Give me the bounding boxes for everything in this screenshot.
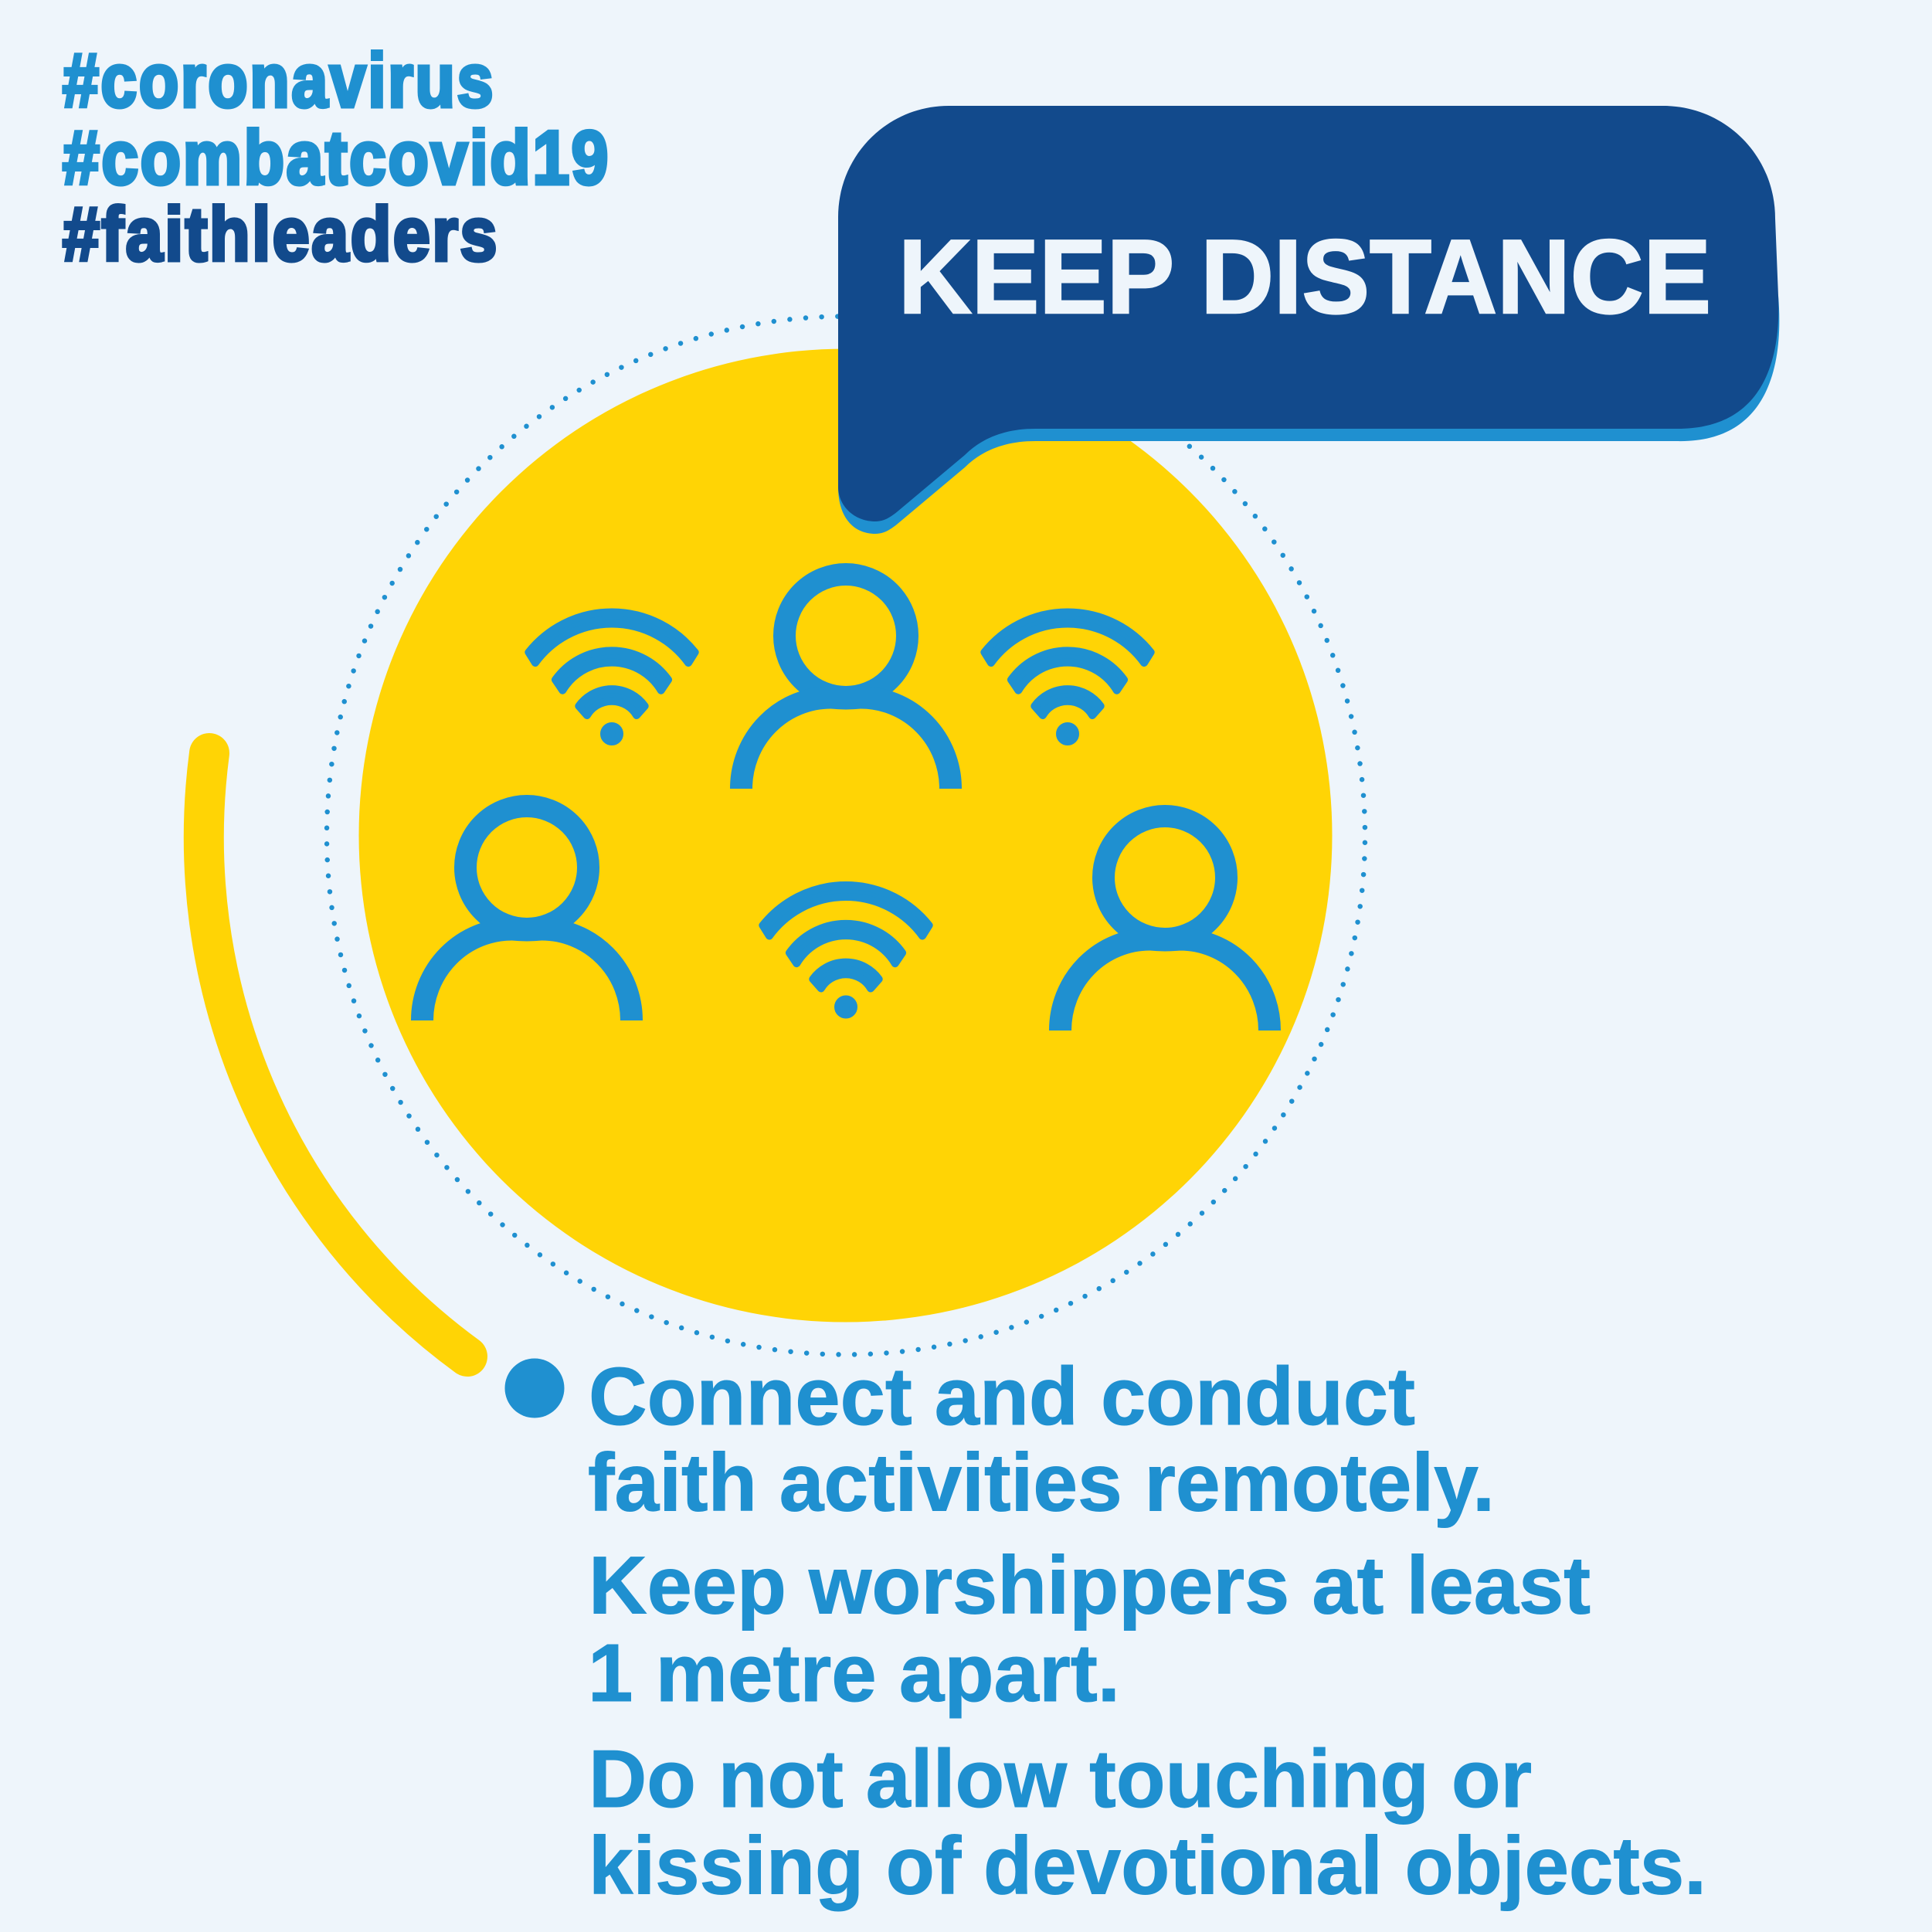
icon: person right — [1060, 816, 1270, 1031]
advice line 6: kissing of devotional objects. — [589, 1820, 1706, 1911]
yellow circle — [358, 349, 1332, 1323]
hashtag: combatcovid19: #combatcovid19 — [63, 115, 610, 200]
bullet dot — [505, 1358, 564, 1418]
advice line 3: Keep worshippers at least — [589, 1540, 1591, 1632]
hashtag: faithleaders: #faithleaders — [63, 192, 499, 277]
icon: wifi top right — [984, 613, 1151, 742]
bubble body — [838, 106, 1778, 521]
icon: wifi bottom centre — [762, 885, 929, 1015]
icon: wifi top left — [528, 613, 695, 742]
hashtags heading — [63, 38, 610, 277]
yellow arc — [204, 753, 467, 1356]
advice line 5: Do not allow touching or — [589, 1733, 1532, 1825]
speech bubble — [838, 106, 1779, 534]
advice line 4: 1 metre apart. — [588, 1628, 1120, 1719]
hashtag: coronavirus: #coronavirus — [63, 38, 495, 123]
bubble title: KEEP DISTANCE — [898, 218, 1711, 335]
advice line 2: faith activities remotely. — [588, 1437, 1495, 1528]
icon: person left — [422, 806, 632, 1020]
advice line 1: Connect and conduct — [589, 1351, 1415, 1442]
icon: person top — [742, 575, 950, 789]
dotted ring — [327, 317, 1365, 1355]
bubble shadow — [838, 296, 1779, 534]
advice text — [588, 1351, 1706, 1911]
